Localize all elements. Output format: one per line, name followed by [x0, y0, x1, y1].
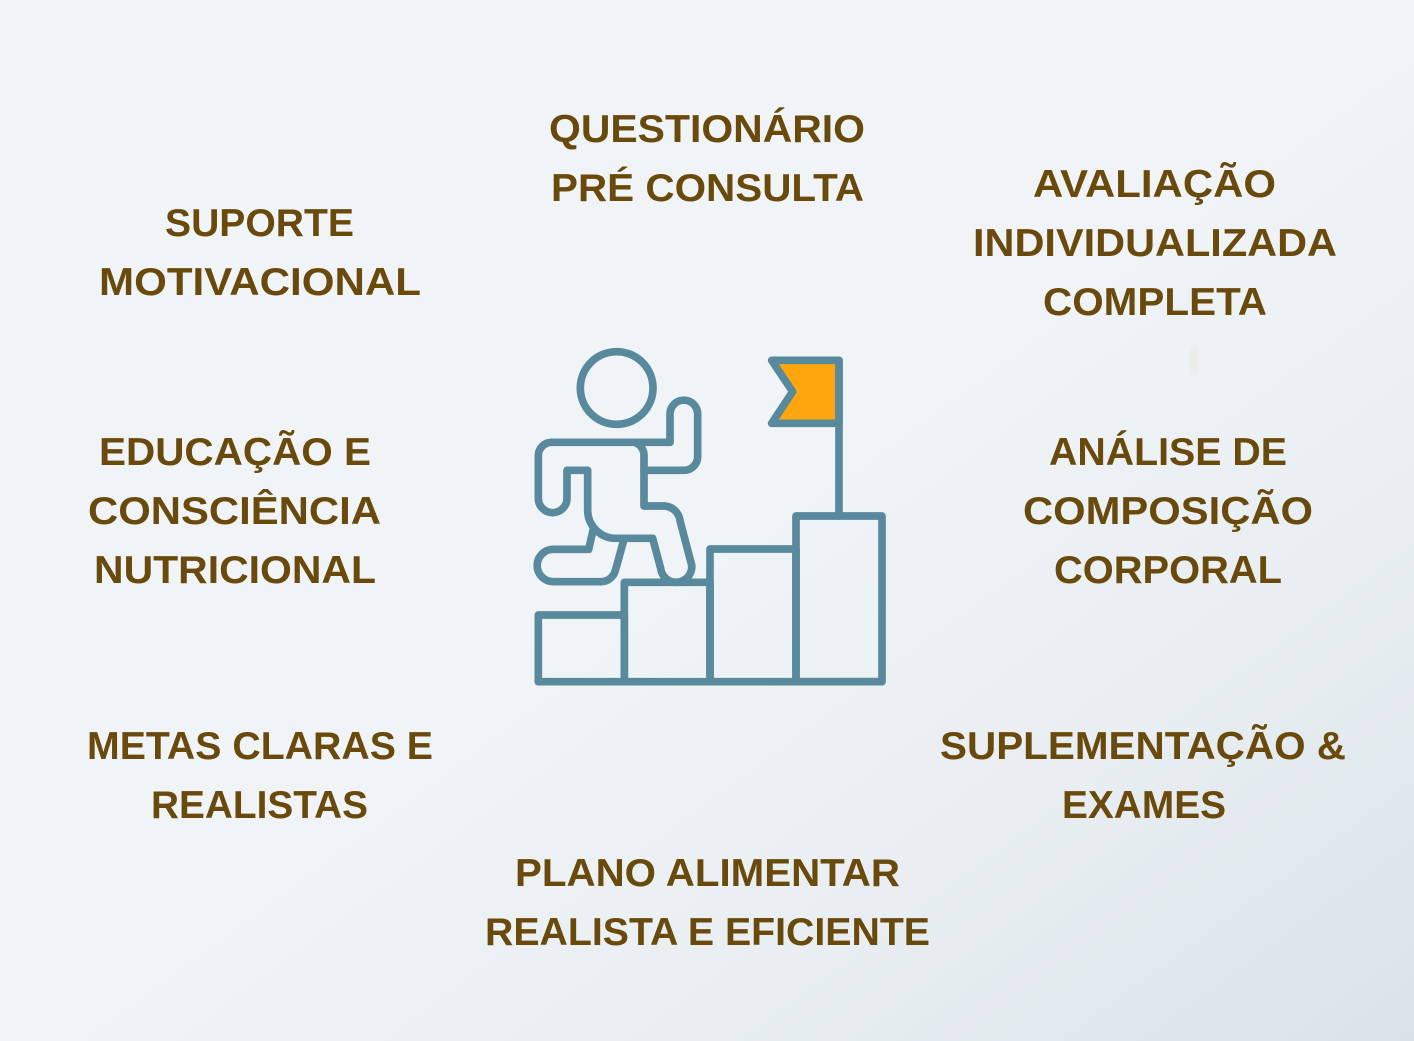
label: metas claras e realistas: METAS CLARAS E [87, 725, 433, 768]
label: plano alimentar realista e eficiente: REALISTA E EFICIENTE [485, 911, 930, 954]
label: metas claras e realistas [87, 725, 433, 827]
label: educação e consciência nutricional [88, 430, 381, 592]
label: educação e consciência nutricional: NUTRICIONAL [94, 549, 376, 592]
label: suplementação e exames: EXAMES [1062, 784, 1226, 827]
label: análise de composição corporal: ANÁLISE DE [1049, 430, 1287, 474]
label: suporte motivacional [99, 202, 421, 304]
label: suporte motivacional: SUPORTE [165, 202, 354, 245]
label: análise de composição corporal: COMPOSIÇÃO [1023, 489, 1313, 533]
label: questionário pré consulta [549, 107, 865, 210]
label: educação e consciência nutricional: EDUCAÇÃO E [99, 430, 371, 474]
label: avaliação individualizada completa [973, 162, 1337, 324]
label: educação e consciência nutricional: CONSCIÊNCIA [88, 489, 381, 533]
icon: person climbing steps toward a flag [537, 352, 882, 682]
label: questionário pré consulta: PRÉ CONSULTA [551, 166, 864, 210]
label: plano alimentar realista e eficiente: PLANO ALIMENTAR [515, 852, 900, 895]
icon: flag [772, 360, 839, 516]
label: avaliação individualizada completa: AVALIAÇÃO [1033, 162, 1276, 206]
icon: person [537, 352, 698, 582]
label: avaliação individualizada completa: COMPLETA [1043, 281, 1267, 324]
label: avaliação individualizada completa: INDIVIDUALIZADA [973, 222, 1337, 265]
label: questionário pré consulta: QUESTIONÁRIO [549, 107, 865, 151]
label: suplementação e exames: SUPLEMENTAÇÃO & [940, 724, 1346, 768]
label: suporte motivacional: MOTIVACIONAL [99, 261, 421, 304]
label: plano alimentar realista e eficiente [485, 852, 930, 954]
label: suplementação e exames [940, 724, 1346, 827]
icon: steps [538, 516, 882, 682]
label: metas claras e realistas: REALISTAS [151, 784, 368, 827]
label: análise de composição corporal: CORPORAL [1054, 549, 1282, 592]
label: análise de composição corporal [1023, 430, 1313, 592]
